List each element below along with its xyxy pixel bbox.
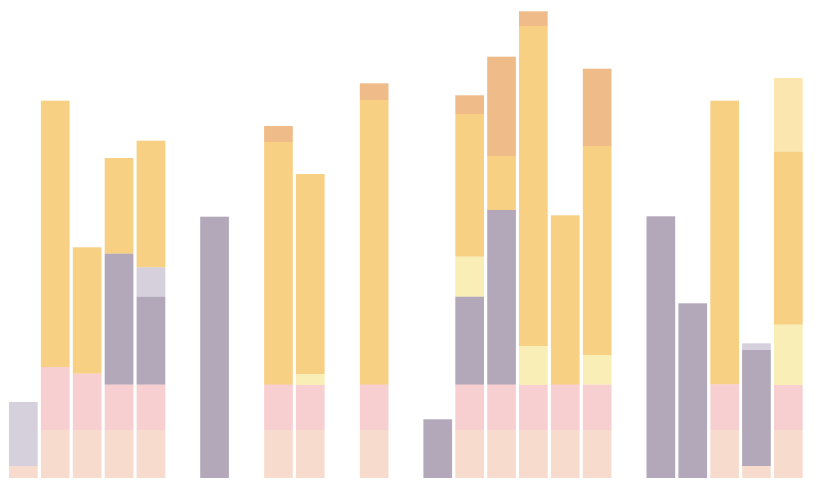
bar 5 (137, 141, 165, 478)
bar 18 (710, 101, 739, 478)
bar 14 (551, 215, 580, 478)
bar 1 (9, 402, 38, 478)
bar 15 (583, 69, 612, 478)
bar 10 (423, 419, 452, 478)
bar 12 (487, 57, 516, 478)
bar 9 (360, 83, 388, 478)
bar 16 (646, 216, 675, 478)
bar 4 (105, 158, 133, 478)
bar 11 (455, 95, 484, 478)
bar 17 (678, 303, 707, 478)
bar 3 (73, 247, 102, 478)
bar 19 (742, 343, 771, 478)
bar 6 (200, 217, 229, 478)
bar 7 (264, 126, 293, 478)
bar 13 (519, 11, 548, 478)
bar 20 (774, 78, 803, 478)
bar 2 (41, 101, 70, 478)
bar 8 (296, 174, 325, 478)
